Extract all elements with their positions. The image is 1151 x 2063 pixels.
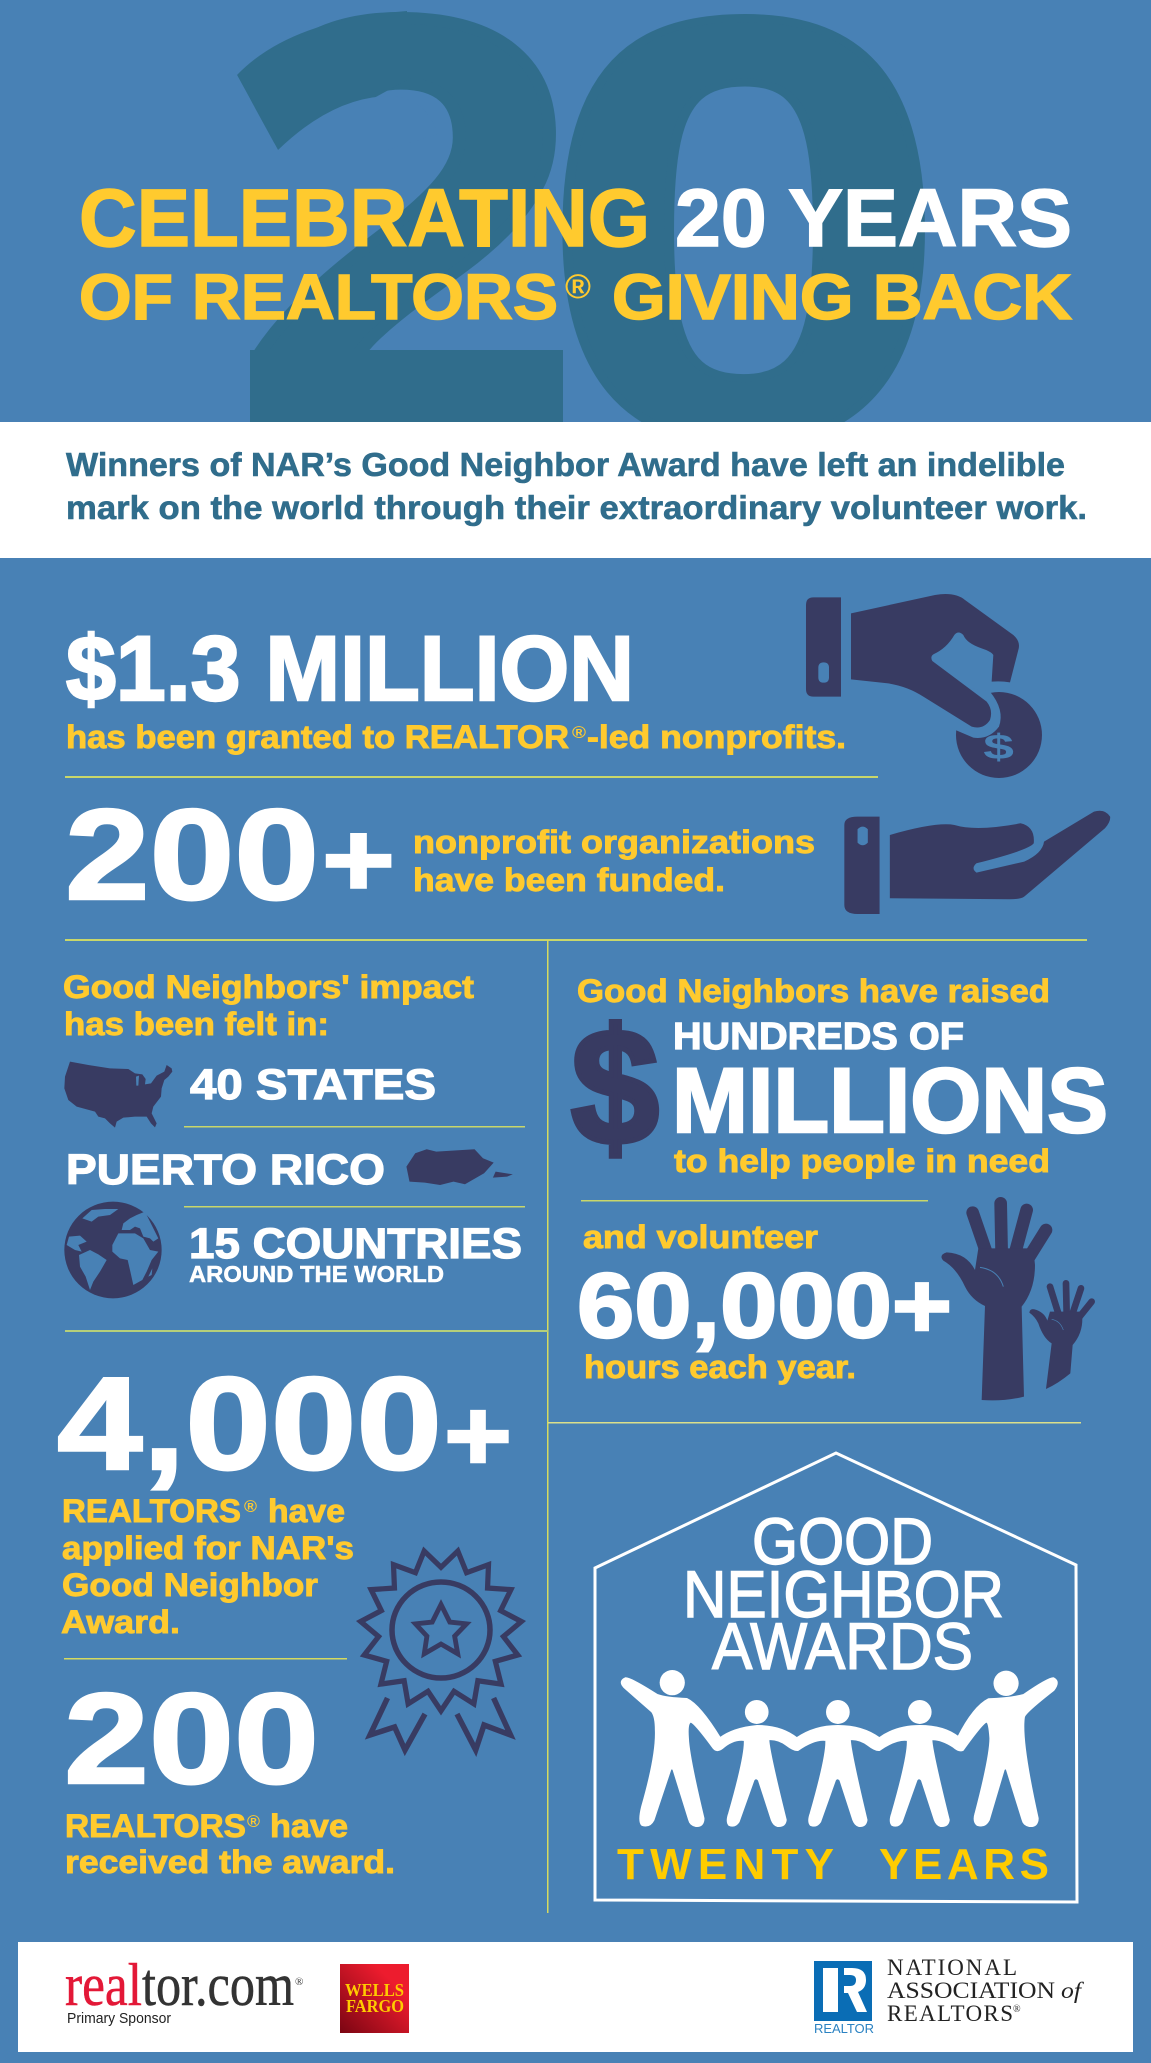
- panel: volunteer hours: and volunteer: [583, 1219, 818, 1255]
- recipients text: [65, 1808, 395, 1880]
- panel: Good Neighbor Awards logo: [595, 1453, 1077, 1902]
- applicants text: [61, 1493, 354, 1640]
- panel: intro band: [0, 422, 1151, 558]
- stat: 200: 200: [64, 1667, 319, 1811]
- applicants text: have: [268, 1493, 345, 1529]
- logo wordmark: GOOD: [752, 1504, 933, 1578]
- logo: National Association of Realtors: [887, 1955, 1085, 2026]
- icon: Puerto Rico map: [406, 1149, 513, 1185]
- stat: 200+ nonprofits: have been funded.: [413, 862, 725, 898]
- stat: 15 countries: AROUND THE WORLD: [189, 1261, 444, 1287]
- icon: award rosette: [361, 1551, 521, 1750]
- title: GIVING BACK: [612, 261, 1072, 333]
- heading: [63, 969, 474, 1042]
- divider: [65, 1330, 548, 1332]
- logo tagline: [617, 1840, 1049, 1889]
- divider: [548, 1422, 1081, 1424]
- house outline: [595, 1453, 1077, 1902]
- panel: volunteer hours: [577, 1219, 952, 1385]
- logo: National Association of Realtors: ASSOCIATION: [887, 1978, 1055, 2003]
- logo: National Association of Realtors: REALTORS: [887, 2001, 1013, 2026]
- divider: [64, 1658, 347, 1660]
- logo tagline: YEARS: [879, 1840, 1049, 1889]
- icon: open hand: [844, 811, 1110, 914]
- recipients text: received the award.: [65, 1844, 395, 1880]
- logo: realtor.com: tor.com: [142, 1952, 294, 2018]
- icon: dollar sign: $: [571, 995, 659, 1179]
- divider: [581, 1200, 928, 1202]
- title: OF REALTORS: [79, 261, 558, 333]
- applicants text: ®: [244, 1497, 257, 1516]
- icon: hand dropping coin: [806, 594, 1042, 778]
- title: [79, 173, 1072, 333]
- applicants text: Good Neighbor: [62, 1567, 318, 1603]
- divider: [184, 1206, 525, 1208]
- panel: hundreds of millions: HUNDREDS OF: [673, 1016, 964, 1058]
- logo: realtor.com: Primary Sponsor: [67, 2010, 171, 2027]
- panel: volunteer hours: hours each year.: [584, 1349, 856, 1385]
- logo wordmark: AWARDS: [712, 1609, 973, 1683]
- title: ®: [565, 268, 591, 306]
- panel: award applicants: [57, 1350, 521, 1880]
- panel: impact locations: [63, 969, 525, 1298]
- stat: 200+ nonprofits: nonprofit organizations: [413, 824, 815, 860]
- stat: $1.3 million: has been granted to REALTOR: [66, 719, 569, 755]
- stat: 40 states: 40 STATES: [190, 1061, 436, 1109]
- title: CELEBRATING: [79, 173, 650, 264]
- heading: Good Neighbors' impact: [63, 969, 474, 1005]
- stat: $1.3 million: $1.3 MILLION: [66, 618, 634, 720]
- stat: 15 countries: [189, 1220, 522, 1287]
- stat: $1.3 million: [66, 618, 846, 755]
- stat: Puerto Rico: PUERTO RICO: [66, 1146, 385, 1194]
- panel: volunteer hours: 60,000+: [577, 1255, 952, 1357]
- divider vertical: [547, 940, 548, 1913]
- panel: hundreds of millions: [571, 973, 1108, 1179]
- logo: Wells Fargo: WELLS: [345, 1980, 404, 2000]
- panel: sponsor footer: [18, 1942, 1133, 2052]
- logo wordmark: [683, 1504, 1004, 1683]
- logo: REALTOR R mark: REALTOR: [814, 2021, 874, 2036]
- intro text: Winners of NAR’s Good Neighbor Award have left an indelible: [66, 446, 1065, 483]
- recipients text: have: [270, 1808, 348, 1844]
- panel: hundreds of millions: to help people in need: [674, 1143, 1050, 1179]
- big background number 20: [237, 11, 925, 422]
- divider: [65, 939, 1087, 941]
- recipients text: ®: [247, 1812, 260, 1831]
- heading: has been felt in:: [64, 1006, 329, 1042]
- logo: realtor.com: real: [65, 1952, 142, 2018]
- logo: National Association of Realtors: ®: [1013, 2004, 1021, 2015]
- stat: $1.3 million: -led nonprofits.: [587, 719, 846, 755]
- logo tagline: TWENTY: [617, 1840, 834, 1889]
- stat: 15 countries: 15 COUNTRIES: [189, 1220, 522, 1268]
- stat: 4,000+: 4,000: [57, 1350, 442, 1497]
- panel: hundreds of millions: Good Neighbors have raised: [577, 973, 1050, 1009]
- logo: Wells Fargo: FARGO: [346, 1996, 404, 2016]
- applicants text: Award.: [61, 1604, 180, 1640]
- applicants text: applied for NAR's: [62, 1530, 354, 1566]
- logo: REALTOR R mark: [814, 1961, 874, 2036]
- logo: Wells Fargo: [340, 1964, 409, 2033]
- intro text: [66, 446, 1087, 526]
- divider: [65, 776, 878, 778]
- icon: hand dropping coin: $: [983, 728, 1014, 767]
- logo: realtor.com: ®: [295, 1976, 303, 1988]
- recipients text: REALTORS: [65, 1808, 246, 1844]
- intro text: mark on the world through their extraordinary volunteer work.: [66, 489, 1087, 526]
- stat: 4,000+: +: [444, 1380, 512, 1492]
- icon: raised hands: [941, 1203, 1092, 1400]
- stat: $1.3 million: ®: [572, 723, 587, 742]
- panel: hundreds of millions: MILLIONS: [672, 1050, 1108, 1152]
- logo: realtor.com: [65, 1952, 303, 2027]
- stat: 200+ nonprofits: 200: [65, 783, 319, 927]
- logo: National Association of Realtors: of: [1061, 1978, 1085, 2003]
- panel: header: [81, 11, 1073, 422]
- logo: National Association of Realtors: NATIONAL: [887, 1955, 1017, 1980]
- title: 20 YEARS: [675, 173, 1072, 264]
- applicants text: REALTORS: [62, 1493, 241, 1529]
- divider: [184, 1126, 525, 1128]
- icon: five people holding hands: [622, 1670, 1057, 1826]
- stat: 200+ nonprofits: +: [322, 802, 395, 919]
- stat: 200+ nonprofits: [65, 783, 815, 927]
- logo wordmark: NEIGHBOR: [683, 1557, 1004, 1631]
- icon: globe: [64, 1202, 162, 1298]
- icon: USA map: [64, 1062, 172, 1128]
